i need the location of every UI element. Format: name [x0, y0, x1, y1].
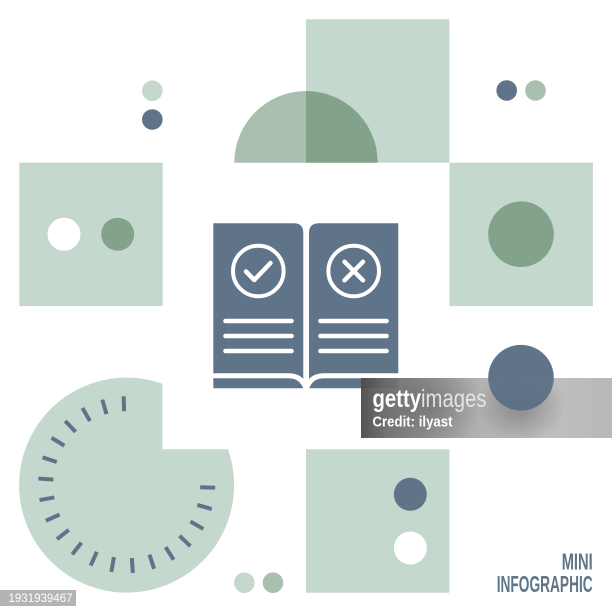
- watermark logo text: gettyimages: [372, 385, 486, 413]
- title: mini infographic: MINI: [562, 548, 593, 574]
- dots: bottom pair: [234, 572, 283, 593]
- title: mini infographic: [497, 548, 593, 597]
- watermark image number: 1931939467: [8, 591, 73, 605]
- icon: check in circle: [233, 246, 284, 296]
- right page text lines: [320, 321, 386, 351]
- panel: bottom square with two circles: [306, 449, 449, 593]
- dots: top left pair: [142, 80, 163, 130]
- icon: cross in circle: [328, 246, 379, 296]
- chart: radial dial with ticks: [19, 378, 234, 593]
- book fold curve: [211, 376, 400, 390]
- half circle left side: [234, 91, 306, 163]
- panel: top square with half circle: [234, 19, 449, 163]
- half circle right side: [306, 91, 378, 163]
- panel: right square with circle: [450, 163, 593, 306]
- circle: large blue accent: [488, 345, 554, 411]
- panel: left square with two circles: [19, 163, 163, 306]
- dots: top right pair: [496, 80, 546, 101]
- watermark credit text: Credit: ilyast: [372, 414, 453, 430]
- left page text lines: [226, 321, 292, 351]
- icon: open book with check and cross: [211, 223, 400, 392]
- right page: [309, 223, 398, 388]
- left page: [213, 223, 303, 388]
- watermark banner: [361, 378, 612, 438]
